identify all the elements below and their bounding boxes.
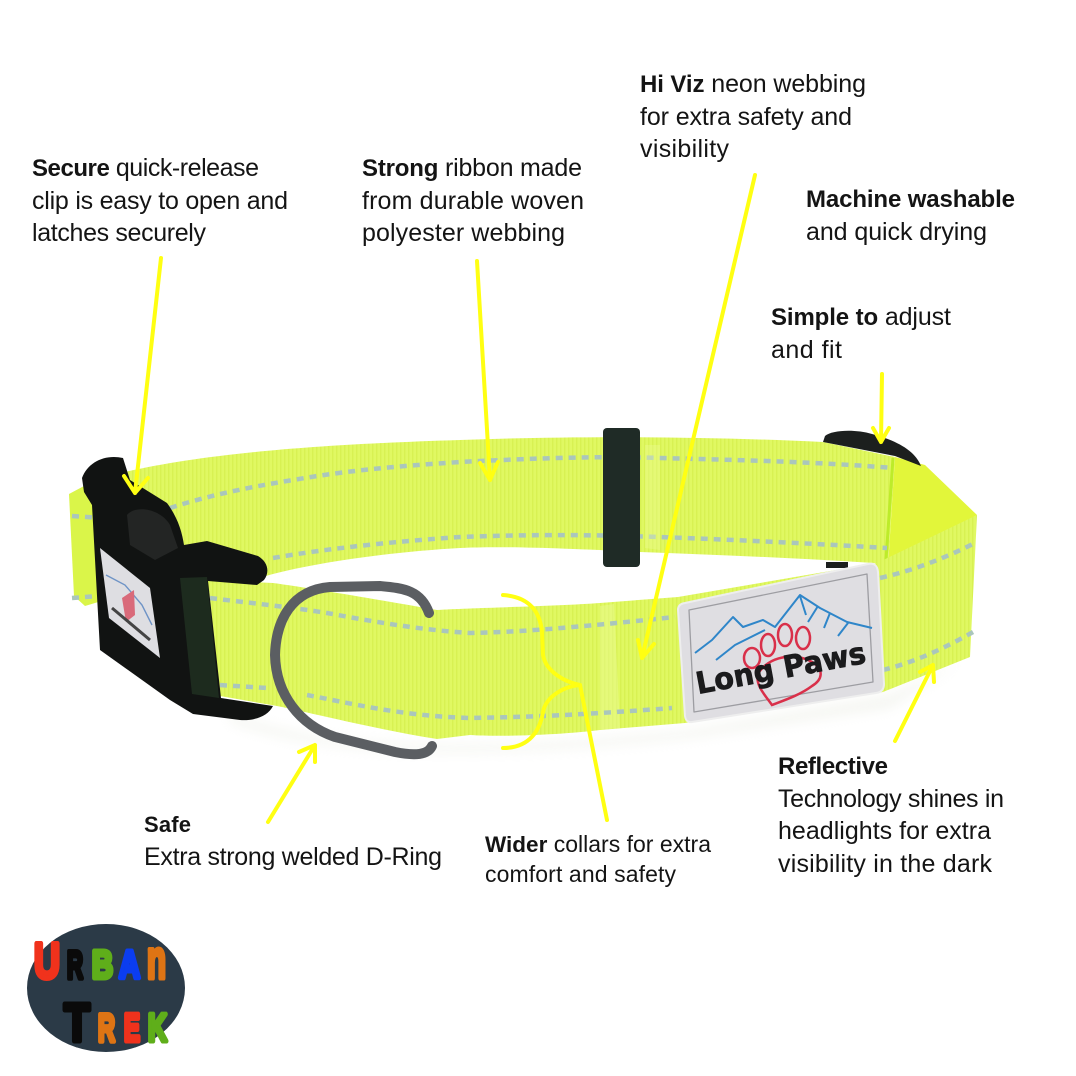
text: simple to adjust: and fit <box>771 336 842 364</box>
paw print <box>744 624 821 705</box>
text: reflective: Technology shines in <box>778 785 1004 813</box>
text: wider collars: comfort and safety <box>485 861 676 887</box>
band: front section <box>208 515 977 739</box>
reflective stitching <box>210 542 977 718</box>
text: hi viz: for extra safety and <box>640 103 852 131</box>
arrow: reflective <box>895 665 934 741</box>
release tab <box>127 509 178 560</box>
text: strong <box>362 154 584 247</box>
clip window <box>180 577 219 698</box>
logo: Urban Trek: R <box>67 944 83 987</box>
logo: Urban Trek: A <box>119 944 140 987</box>
arrow: d-ring <box>268 745 315 822</box>
arrow: secure clip <box>124 258 161 493</box>
clip logo plate <box>100 548 160 658</box>
arrow: strong ribbon <box>477 261 498 480</box>
quick-release clip <box>82 457 273 720</box>
text: strong: polyester webbing <box>362 219 565 247</box>
logo: Urban Trek: B <box>92 944 113 987</box>
text: strong: Strong ribbon made <box>362 154 582 182</box>
tag wordmark: Long Paws <box>693 636 869 702</box>
text: secure <box>32 154 288 247</box>
text: machine washable: Machine washable <box>806 186 1015 213</box>
text: reflective: Reflective <box>778 753 888 780</box>
text: hi viz <box>640 70 866 163</box>
D-ring <box>275 586 432 754</box>
bracket arrow: wider collars <box>503 595 607 820</box>
text: secure: clip is easy to open and <box>32 187 288 215</box>
text: simple to adjust: Simple to adjust <box>771 303 951 331</box>
text: secure: Secure quick-release <box>32 154 259 182</box>
logo: Urban Trek: T <box>64 993 90 1053</box>
text: secure: latches securely <box>32 219 206 247</box>
text: hi viz: visibility <box>640 135 730 163</box>
logo: Urban Trek: E <box>124 1007 140 1050</box>
logo: Urban Trek: U <box>34 933 60 989</box>
collar photo <box>69 428 977 754</box>
band: inner face at right <box>888 457 977 566</box>
logo: Urban Trek: K <box>148 1007 167 1050</box>
keeper loop <box>603 428 640 567</box>
adjuster buckle <box>823 431 921 466</box>
text: simple to adjust <box>771 303 951 364</box>
text: machine washable: and quick drying <box>806 218 987 246</box>
text: safe <box>144 812 442 871</box>
text: safe: Safe <box>144 812 191 837</box>
text: wider collars <box>485 831 711 887</box>
arrow: hi viz webbing <box>638 175 755 658</box>
text: safe: Extra strong welded D-Ring <box>144 843 442 871</box>
text: reflective: visibility in the dark <box>778 850 992 878</box>
text: reflective <box>778 753 1004 878</box>
rear stitching <box>72 457 893 598</box>
mountains <box>695 595 872 660</box>
logo: Urban Trek <box>27 924 185 1053</box>
band: rear section <box>125 437 895 600</box>
text: strong: from durable woven <box>362 187 584 215</box>
text: machine washable <box>806 186 1015 246</box>
text: wider collars: Wider collars for extra <box>485 831 711 857</box>
logo: Urban Trek: n <box>147 930 166 990</box>
arrow: simple to adjust <box>873 374 889 442</box>
brand tag <box>678 564 884 722</box>
text: reflective: headlights for extra <box>778 817 991 845</box>
band: left end behind clip <box>69 486 105 606</box>
logo: Urban Trek: R <box>98 1007 115 1050</box>
text: hi viz: Hi Viz neon webbing <box>640 70 866 98</box>
